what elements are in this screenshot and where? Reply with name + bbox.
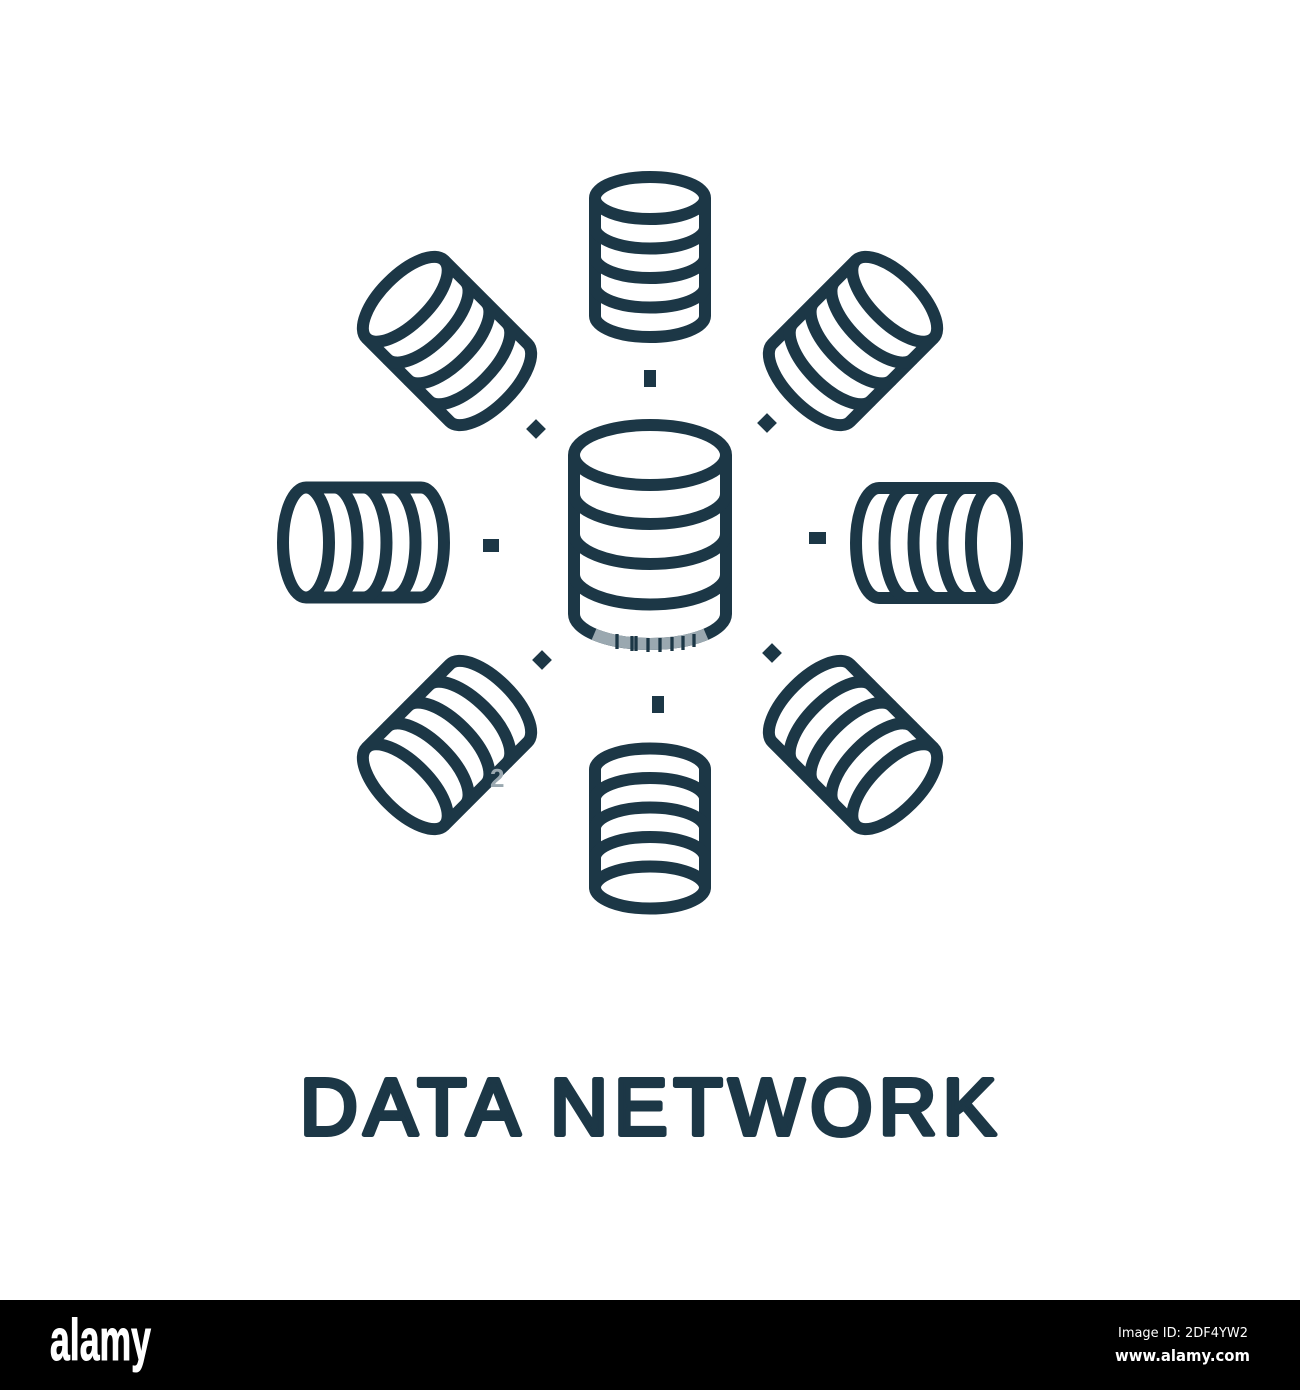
icon: right database cylinder xyxy=(856,488,1017,598)
footer logo: alamy xyxy=(50,1308,151,1373)
title: DATA NETWORK xyxy=(300,1062,996,1152)
icon: left database cylinder xyxy=(283,488,444,598)
icon: bottom-right database cylinder xyxy=(755,647,951,843)
icon: bottom-left database cylinder xyxy=(349,647,545,843)
icon: top-right database cylinder xyxy=(755,243,951,439)
watermark digit on bottom-left cylinder: 2 xyxy=(490,763,504,793)
footer bar xyxy=(0,1300,1300,1390)
connector dots between the hub and outer cylinders xyxy=(483,370,826,713)
icon: top database cylinder xyxy=(595,177,705,337)
image id: Image ID: 2DF4YW2 xyxy=(1118,1326,1248,1341)
icon: central database cylinder xyxy=(574,425,726,652)
icon: bottom database cylinder xyxy=(595,749,705,908)
website: www.alamy.com xyxy=(1115,1346,1250,1365)
icon: top-left database cylinder xyxy=(349,243,545,439)
